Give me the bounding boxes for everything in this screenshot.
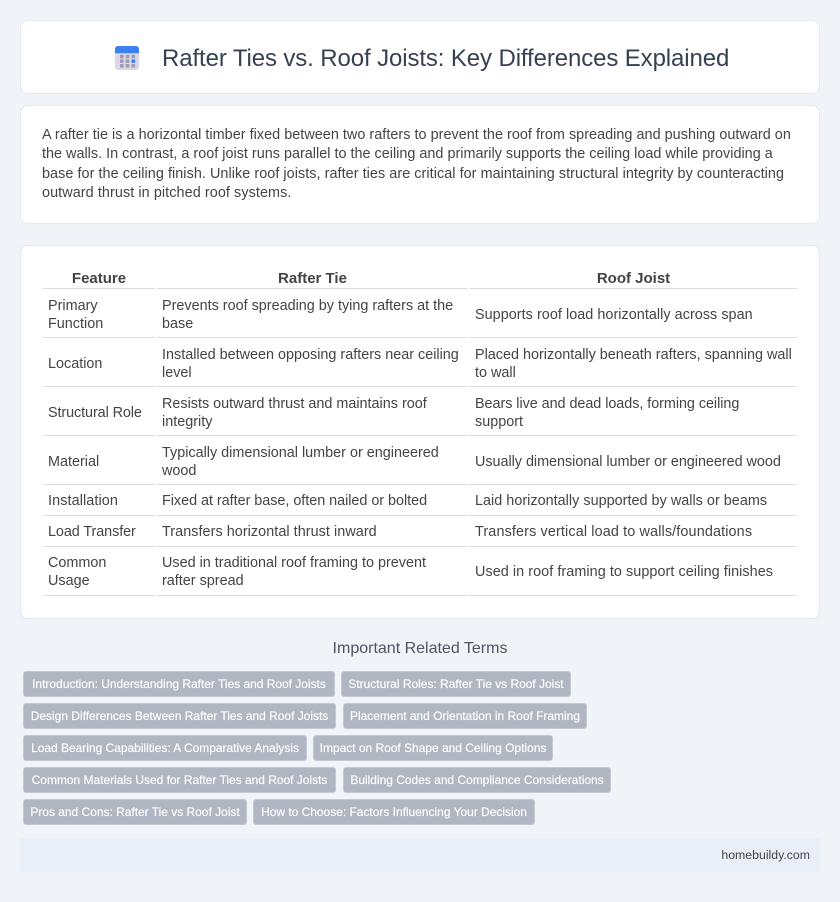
intro panel xyxy=(20,105,820,224)
comparison table xyxy=(43,270,797,596)
title: Rafter Ties vs. Roof Joists: Key Differences Explained xyxy=(162,45,729,72)
comparison table: Laid horizontally supported by walls or beams xyxy=(475,493,767,509)
related term tags: Placement and Orientation in Roof Framing xyxy=(350,709,580,723)
related term tags: Structural Roles: Rafter Tie vs Roof Joist xyxy=(348,677,564,691)
comparison table: Placed horizontally beneath rafters, spanning wall xyxy=(475,347,792,363)
comparison table: Common xyxy=(48,555,106,571)
comparison table: Supports roof load horizontally across span xyxy=(475,307,753,323)
comparison table: Function xyxy=(48,316,103,332)
icon: calendar xyxy=(115,46,139,70)
comparison table: Primary xyxy=(48,298,98,314)
comparison table: Usually dimensional lumber or engineered wood xyxy=(475,454,781,470)
comparison table: Resists outward thrust and maintains roof xyxy=(162,396,427,412)
footer source: homebuildy.com xyxy=(721,848,810,862)
related term tags: How to Choose: Factors Influencing Your Decision xyxy=(261,805,527,819)
column headers xyxy=(72,270,670,287)
related term tags: Pros and Cons: Rafter Tie vs Roof Joist xyxy=(30,805,240,819)
comparison table: Bears live and dead loads, forming ceiling xyxy=(475,396,739,412)
comparison table: Typically dimensional lumber or engineered xyxy=(162,445,439,461)
comparison table: Structural Role xyxy=(48,405,142,421)
comparison table: Location xyxy=(48,356,102,372)
related term tags: Impact on Roof Shape and Ceiling Options xyxy=(320,741,546,755)
table panel xyxy=(20,245,820,619)
comparison table: base xyxy=(162,316,193,332)
column headers: Roof Joist xyxy=(597,270,670,287)
column headers: Feature xyxy=(72,270,126,287)
comparison table: Load Transfer xyxy=(48,524,136,540)
comparison table: Fixed at rafter base, often nailed or bolted xyxy=(162,493,427,509)
comparison table: integrity xyxy=(162,414,212,430)
comparison table: to wall xyxy=(475,365,516,381)
related term tags: Common Materials Used for Rafter Ties and Roof Joists xyxy=(32,773,327,787)
related term tags: Design Differences Between Rafter Ties and Roof Joists xyxy=(31,709,328,723)
comparison table: support xyxy=(475,414,523,430)
comparison table: Prevents roof spreading by tying rafters at the xyxy=(162,298,453,314)
comparison table: Usage xyxy=(48,573,90,589)
related term tags: Building Codes and Compliance Considerations xyxy=(350,773,604,787)
related term tags: Load Bearing Capabilities: A Comparative Analysis xyxy=(31,741,299,755)
footer bar xyxy=(20,838,820,872)
related term tags: Introduction: Understanding Rafter Ties and Roof Joists xyxy=(32,677,326,691)
intro text: base for the ceiling finish. Unlike roof joists, rafter ties are critical for maintaining structural integrity by counteracting xyxy=(42,166,784,182)
column headers: Rafter Tie xyxy=(278,270,347,287)
comparison table: level xyxy=(162,365,192,381)
comparison table: Material xyxy=(48,454,99,470)
comparison table: rafter spread xyxy=(162,573,244,589)
intro text: the walls. In contrast, a roof joist runs parallel to the ceiling and primarily supports the ceiling load while providing a xyxy=(42,146,773,162)
comparison table: Used in traditional roof framing to prevent xyxy=(162,555,426,571)
comparison table: Transfers vertical load to walls/foundations xyxy=(475,524,752,540)
comparison table: Transfers horizontal thrust inward xyxy=(162,524,377,540)
related term tags xyxy=(23,671,611,825)
header panel xyxy=(20,20,820,94)
comparison table: Installed between opposing rafters near ceiling xyxy=(162,347,459,363)
comparison table: Used in roof framing to support ceiling finishes xyxy=(475,564,773,580)
intro text: A rafter tie is a horizontal timber fixed between two rafters to prevent the roof from spreading and pushing outward on xyxy=(42,127,791,143)
intro text: outward thrust in pitched roof systems. xyxy=(42,185,291,201)
related terms heading: Important Related Terms xyxy=(333,640,507,657)
comparison table: Installation xyxy=(48,493,118,509)
intro text xyxy=(42,127,791,201)
comparison table: wood xyxy=(162,463,196,479)
